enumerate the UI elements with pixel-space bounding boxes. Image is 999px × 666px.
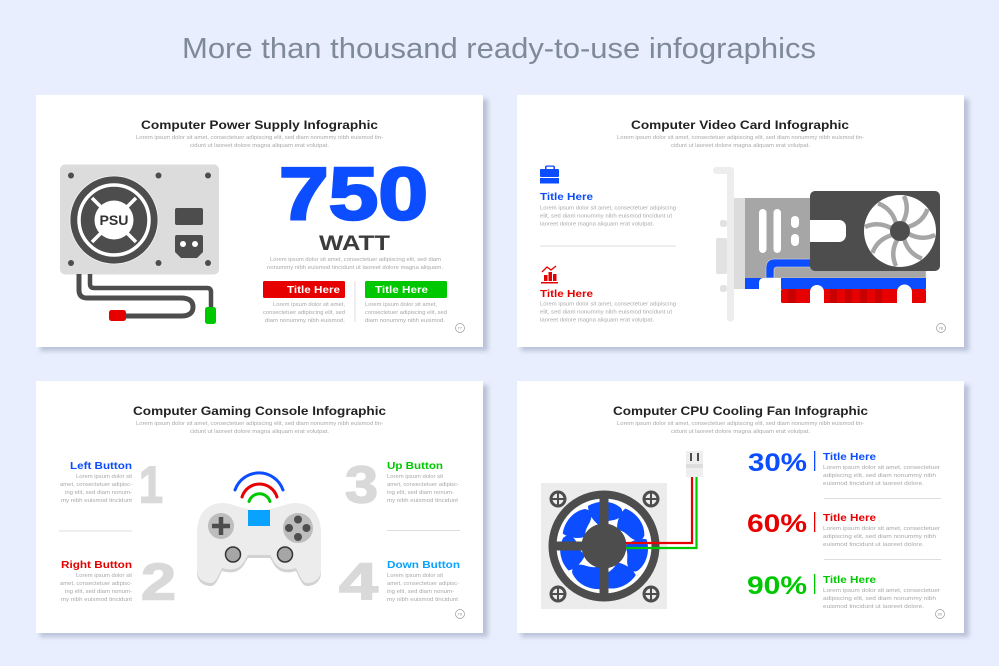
intro text xyxy=(617,135,864,149)
right button block: amet, consectetuer adipisc- xyxy=(60,581,132,587)
left button block: my nibh euismod tincidunt xyxy=(61,498,133,504)
up button block: amet, consectetuer adipisc- xyxy=(387,482,459,488)
icon: game controller xyxy=(197,473,321,586)
big number 750: 750 xyxy=(279,152,428,236)
page number xyxy=(456,324,464,332)
stat 60%: Title Here xyxy=(823,512,876,524)
right button block: ing elit, sed diam nonum- xyxy=(65,589,132,595)
red column text: diam nonummy nibh euismod. xyxy=(265,318,345,324)
down button block: my nibh euismod tincidunt xyxy=(387,597,459,603)
red text block: laoreet dolore magna aliquam erat volutpat. xyxy=(540,318,654,324)
intro text: cidunt ut laoreet dolore magna aliquam erat volutpat. xyxy=(671,143,810,149)
stat 90%: 90% xyxy=(747,572,807,600)
left button block: Lorem ipsum dolor sit xyxy=(76,474,133,480)
heading: cooling fan: Computer CPU Cooling Fan Infographic xyxy=(613,404,868,418)
down button block: Lorem ipsum dolor sit xyxy=(387,573,444,579)
panel: gaming console xyxy=(36,381,488,637)
red column text: Lorem ipsum dolor sit amet, xyxy=(273,302,346,308)
left button block xyxy=(60,460,133,504)
stat 90% xyxy=(747,572,940,610)
down button block: ing elit, sed diam nonum- xyxy=(387,589,454,595)
green column text: consectetuer adipiscing elit, sed xyxy=(365,310,447,316)
up button block: Lorem ipsum dolor sit xyxy=(387,474,444,480)
stat 60%: euismod tincidunt ut laoreet dolore. xyxy=(823,542,924,548)
right button block: Right Button xyxy=(61,559,132,571)
up button block: ing elit, sed diam nonum- xyxy=(387,490,454,496)
blue text block xyxy=(540,206,676,228)
stat 90%: euismod tincidunt ut laoreet dolore. xyxy=(823,604,924,610)
number 3: 3 xyxy=(345,456,378,514)
left button block: ing elit, sed diam nonum- xyxy=(65,490,132,496)
page number: 78 xyxy=(938,326,944,330)
stat 90%: Title Here xyxy=(823,574,876,586)
icon: PSU unit xyxy=(60,164,219,324)
up button block: my nibh euismod tincidunt xyxy=(387,498,459,504)
number 4: 4 xyxy=(339,554,378,612)
green column text: Lorem ipsum dolor sit amet, xyxy=(365,302,438,308)
watt description: nonummy nibh euismod tincidunt ut laoreet dolore magna aliquam. xyxy=(267,265,443,271)
stat 30%: adipiscing elit, sed diam nonummy nibh xyxy=(823,473,936,479)
page number xyxy=(936,324,946,332)
right button block xyxy=(60,559,133,603)
green column text: diam nonummy nibh euismod. xyxy=(365,318,445,324)
stat 90%: adipiscing elit, sed diam nonummy nibh xyxy=(823,596,936,602)
stat 30%: Lorem ipsum dolor sit amet, consectetuer xyxy=(823,465,940,471)
icon: bar chart xyxy=(541,266,558,284)
heading: video card: Computer Video Card Infographic xyxy=(631,118,849,132)
page number: 77 xyxy=(458,326,463,330)
red title button xyxy=(263,281,345,298)
stat 60%: Lorem ipsum dolor sit amet, consectetuer xyxy=(823,526,940,532)
intro text: cidunt ut laoreet dolore magna aliquam erat volutpat. xyxy=(671,429,810,435)
graphics card illustration xyxy=(713,167,940,322)
green column text xyxy=(365,302,447,324)
page number: 79 xyxy=(458,612,463,616)
intro text: Lorem ipsum dolor sit amet, consectetuer adipiscing elit, sed diam nonummy nibh euismod tin- xyxy=(136,421,383,427)
intro text: cidunt ut laoreet dolore magna aliquam erat volutpat. xyxy=(190,143,329,149)
right button block: Lorem ipsum dolor sit xyxy=(76,573,133,579)
green title button xyxy=(365,281,447,298)
right button block: my nibh euismod tincidunt xyxy=(61,597,133,603)
down button block: Down Button xyxy=(387,559,460,571)
red column text xyxy=(263,302,346,324)
intro text xyxy=(136,135,383,149)
blue text block: laoreet dolore magna aliquam erat volutpat. xyxy=(540,222,654,228)
WATT label: WATT xyxy=(319,232,390,255)
stat 60%: 60% xyxy=(747,510,807,538)
page number xyxy=(456,610,464,618)
number 1: 1 xyxy=(139,456,163,514)
red column text: consectetuer adipiscing elit, sed xyxy=(263,310,345,316)
green title button: Title Here xyxy=(375,284,428,296)
intro text: Lorem ipsum dolor sit amet, consectetuer adipiscing elit, sed diam nonummy nibh euismod tin- xyxy=(136,135,383,141)
up button block xyxy=(387,460,459,504)
heading: gaming console: Computer Gaming Console Infographic xyxy=(133,404,386,418)
heading: power supply: Computer Power Supply Infographic xyxy=(141,118,378,132)
page number: 20 xyxy=(938,612,943,616)
down button block: amet, consectetuer adipisc- xyxy=(387,581,459,587)
stat 30%: 30% xyxy=(748,449,807,477)
watt description xyxy=(267,257,443,271)
intro text xyxy=(617,421,864,435)
left button block: amet, consectetuer adipisc- xyxy=(60,482,132,488)
blue text block: Lorem ipsum dolor sit amet, consectetuer adipiscing xyxy=(540,206,676,212)
red text block xyxy=(540,302,676,324)
down button block xyxy=(387,559,460,603)
blue text block: elit, sed diam nonummy nibh euismod tincidunt ut xyxy=(540,214,673,220)
up button block: Up Button xyxy=(387,460,443,472)
stat 60%: adipiscing elit, sed diam nonummy nibh xyxy=(823,534,936,540)
intro text: cidunt ut laoreet dolore magna aliquam erat volutpat. xyxy=(190,429,329,435)
red title button: Title Here xyxy=(287,284,340,296)
number 2: 2 xyxy=(141,554,176,612)
red title: Title Here xyxy=(540,288,593,300)
main heading: More than thousand ready-to-use infographics xyxy=(182,33,816,65)
stat 30% xyxy=(748,449,940,487)
intro text xyxy=(136,421,383,435)
red text block: elit, sed diam nonummy nibh euismod tincidunt ut xyxy=(540,310,673,316)
intro text: Lorem ipsum dolor sit amet, consectetuer adipiscing elit, sed diam nonummy nibh euismod tin- xyxy=(617,421,864,427)
red text block: Lorem ipsum dolor sit amet, consectetuer adipiscing xyxy=(540,302,676,308)
panel: power supply xyxy=(36,95,488,351)
blue title: Title Here xyxy=(540,191,593,203)
page number xyxy=(936,610,944,618)
panel: video card xyxy=(517,95,969,351)
icon: PSU unit: PSU xyxy=(100,212,128,228)
intro text: Lorem ipsum dolor sit amet, consectetuer adipiscing elit, sed diam nonummy nibh euismod tin- xyxy=(617,135,864,141)
stat 30%: Title Here xyxy=(823,451,876,463)
left button block: Left Button xyxy=(70,460,132,472)
icon: cooling fan xyxy=(541,451,703,609)
stat 90%: Lorem ipsum dolor sit amet, consectetuer xyxy=(823,588,940,594)
watt description: Lorem ipsum dolor sit amet, consectetuer adipiscing elit, sed diam xyxy=(270,257,442,263)
stat 60% xyxy=(747,510,940,548)
panel: CPU cooling fan xyxy=(517,381,969,637)
icon: briefcase xyxy=(540,166,559,184)
stat 30%: euismod tincidunt ut laoreet dolore. xyxy=(823,481,924,487)
